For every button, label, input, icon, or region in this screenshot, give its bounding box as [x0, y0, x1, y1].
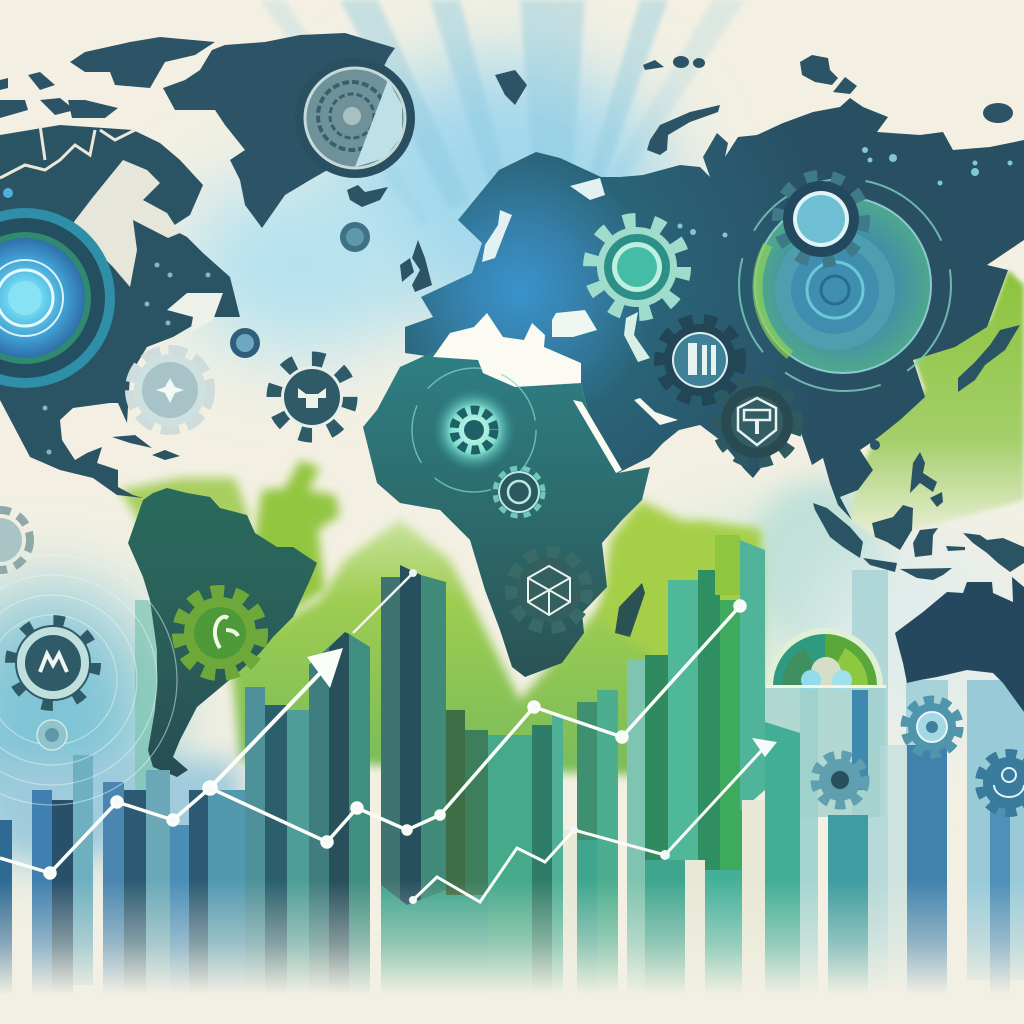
map: North America dots	[3, 188, 210, 454]
bar chart: teal and dark bars	[245, 565, 446, 1000]
map: Greenland	[163, 33, 395, 228]
map: North America	[0, 125, 240, 498]
icon: small gear	[230, 328, 260, 358]
map: Caspian Sea	[624, 312, 650, 362]
map: Southeast Asia islands	[813, 440, 1024, 580]
pale background bars	[73, 570, 1024, 1000]
icon: small top gear	[340, 222, 370, 252]
map: Black Sea	[552, 310, 597, 337]
icon: pale gear	[131, 351, 209, 429]
map: Canadian Arctic islands	[0, 37, 215, 118]
bar chart: lower step and green bars	[381, 535, 765, 1000]
line chart: main white trend	[0, 601, 745, 878]
icon: Africa box gear	[511, 552, 587, 628]
bar chart: right bars	[765, 690, 1010, 1000]
icon: big right disc	[739, 179, 951, 391]
icon: Africa glowing gear	[412, 368, 536, 492]
green splash	[120, 270, 1024, 780]
map: British Isles	[400, 240, 432, 292]
icon: gear with bars	[660, 320, 740, 400]
icon: teal gear	[591, 221, 683, 313]
icon: rainbow dome	[766, 628, 886, 690]
map: Asia dots	[678, 147, 1012, 238]
map: Canadian straits	[0, 125, 135, 178]
map: Madagascar	[615, 583, 645, 637]
icon: small pale badge	[37, 720, 67, 750]
icon: gear on disc	[779, 177, 863, 261]
icon: left pale gear	[0, 510, 30, 570]
map: Scandinavia and Baltic highlights	[482, 178, 605, 262]
icon: glass circle top	[295, 58, 415, 178]
map: Red Sea	[573, 400, 622, 473]
map: Persian Gulf	[634, 398, 678, 425]
map: Cuba and Hispaniola	[112, 435, 180, 460]
bar chart: left blue bars	[0, 770, 245, 1000]
icon: dark gear	[275, 360, 349, 434]
bottom fade	[0, 880, 1024, 1024]
icon: South America green gear	[179, 592, 261, 674]
icon: Africa small badge	[495, 468, 543, 516]
map: Japan	[958, 325, 1020, 392]
icon: blue gear with figure	[905, 700, 959, 754]
map: Iceland and Arctic islands	[347, 55, 1013, 207]
icon: gear with sign	[717, 382, 797, 462]
arrow: lower trend	[409, 738, 777, 904]
icon: teal gear bottom	[815, 755, 865, 805]
sun rays	[260, 0, 745, 225]
icon: left dark gear	[11, 621, 95, 705]
arrow: rising left trend	[210, 569, 417, 788]
map: Australia	[895, 577, 1024, 712]
icon: large left target	[0, 208, 115, 388]
icon: blue gear right	[980, 754, 1024, 812]
map: Africa	[363, 352, 650, 677]
map: Gulf of St Lawrence	[167, 293, 223, 333]
map: South America	[128, 488, 317, 777]
bar chart: lower gaps	[563, 800, 765, 1000]
map: Eurasia	[405, 98, 1024, 520]
map: Mediterranean	[433, 313, 581, 387]
map: Hudson Bay	[70, 160, 180, 287]
concentric rings lower left	[0, 555, 177, 805]
